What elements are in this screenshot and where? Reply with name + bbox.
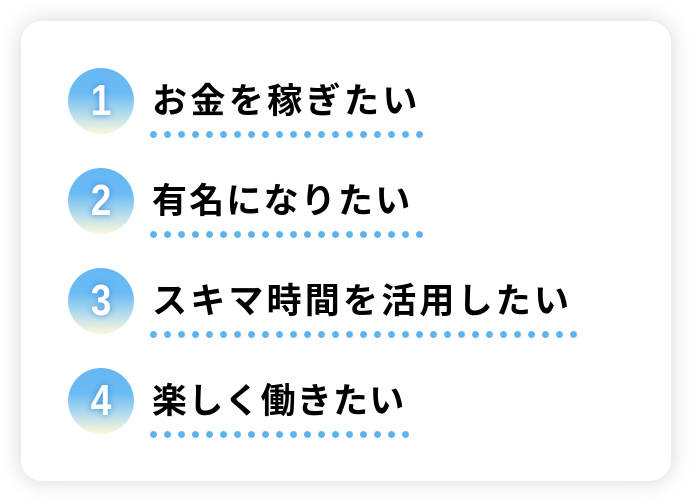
list item 1 (68, 68, 423, 138)
number badge 2 (68, 168, 134, 234)
dotted underline 1 (150, 131, 423, 138)
list item 4 (68, 368, 409, 438)
text: item 1: お金を稼ぎたい (152, 82, 421, 121)
number badge 1 (68, 68, 134, 134)
number badge 4 (68, 368, 134, 434)
text: item 3: スキマ時間を活用したい (152, 282, 572, 321)
text: item 2: 有名になりたい (152, 182, 412, 221)
dotted underline 4 (150, 431, 409, 438)
number badge 1: 1 (91, 76, 111, 125)
number badge 3 (68, 268, 134, 334)
number badge 3: 3 (91, 276, 111, 325)
number badge 2: 2 (91, 176, 111, 225)
dotted underline 2 (150, 231, 423, 238)
list item 2 (68, 168, 423, 238)
number badge 4: 4 (91, 376, 111, 425)
text: item 4: 楽しく働きたい (152, 382, 405, 421)
list item 3 (68, 268, 577, 338)
dotted underline 3 (150, 331, 577, 338)
